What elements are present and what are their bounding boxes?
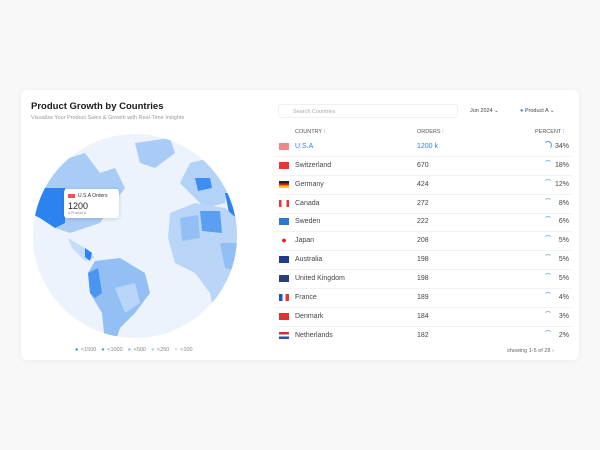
table rows: Switzerland: [295, 162, 331, 169]
table rows: Denmark: [295, 313, 323, 320]
table rows: U.S.A: [295, 143, 313, 150]
text: ORDERS ⁞: [417, 129, 444, 135]
table rows: 5%: [559, 256, 569, 263]
table rows: 3%: [559, 313, 569, 320]
table rows: 272: [417, 200, 429, 207]
table rows: 12%: [555, 181, 569, 188]
product dropdown: ● Product A ⌄: [520, 108, 555, 114]
table rows: 424: [417, 181, 429, 188]
africa: [168, 203, 237, 303]
south america: [88, 258, 150, 343]
title: Product Growth by Countries: [31, 101, 163, 112]
table header: COUNTRY ⁞: [295, 129, 325, 135]
table rows: 5%: [559, 275, 569, 282]
table rows: Canada: [295, 200, 320, 207]
table rows: 34%: [555, 143, 569, 150]
table rows: 18%: [555, 162, 569, 169]
table rows: France: [295, 294, 317, 301]
legend: ● <1500 ● <1000 ● <500 ● <250 ● <100: [75, 347, 193, 353]
north america: [30, 153, 125, 233]
table rows: Sweden: [295, 218, 320, 225]
table rows: 4%: [559, 294, 569, 301]
date dropdown: Jun 2024 ⌄: [470, 108, 499, 114]
card: [21, 90, 579, 360]
table rows: 189: [417, 294, 429, 301]
table rows: 182: [417, 332, 429, 339]
table rows: 5%: [559, 237, 569, 244]
table rows: 8%: [559, 200, 569, 207]
search box: Search Countries: [293, 109, 336, 115]
table rows: 670: [417, 162, 429, 169]
tooltip: 1200: [68, 201, 88, 211]
search box: [278, 104, 458, 118]
text: PERCENT ⁞: [535, 129, 564, 135]
table rows: Japan: [295, 237, 314, 244]
table rows: Australia: [295, 256, 322, 263]
table rows: 184: [417, 313, 429, 320]
europe: [180, 160, 227, 206]
table rows: 1200 k: [417, 143, 438, 150]
table rows: 222: [417, 218, 429, 225]
table rows: Netherlands: [295, 332, 333, 339]
table rows: Germany: [295, 181, 324, 188]
table rows: 2%: [559, 332, 569, 339]
table rows: United Kingdom: [295, 275, 345, 282]
tooltip: [64, 189, 119, 218]
table rows: 208: [417, 237, 429, 244]
tooltip: U.S.A Orders: [78, 193, 107, 199]
globe map: [33, 134, 237, 338]
table rows: 6%: [559, 218, 569, 225]
subtitle: Visualize Your Product Sales & Growth with Real-Time Insights: [31, 115, 184, 121]
table rows: 198: [417, 256, 429, 263]
pagination: showing 1-5 of 28 ›: [507, 348, 554, 354]
table rows: 198: [417, 275, 429, 282]
tooltip: ● Product A: [68, 211, 86, 215]
